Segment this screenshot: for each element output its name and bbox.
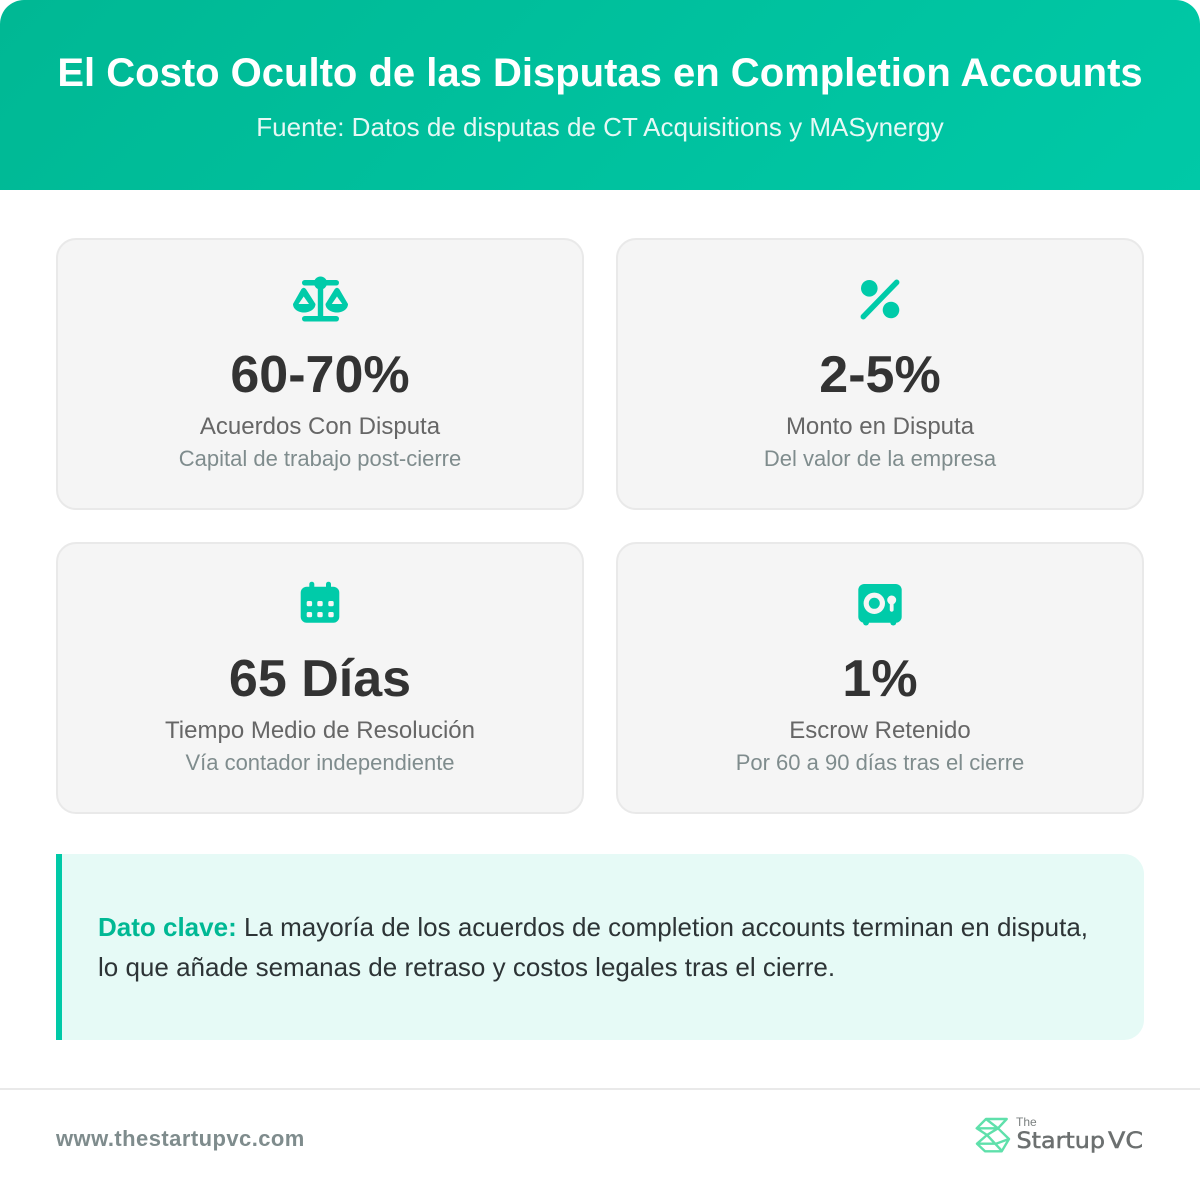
stat note: Capital de trabajo post-cierre bbox=[179, 446, 461, 471]
panel: tiempo medio de resolucion bbox=[56, 542, 584, 814]
logo: The Startup VC bbox=[975, 1115, 1143, 1154]
stat label: Acuerdos Con Disputa bbox=[200, 413, 440, 440]
logo: The Startup VC: Startup bbox=[1016, 1129, 1105, 1154]
icon: calendar bbox=[300, 582, 340, 623]
logo: The Startup VC: VC bbox=[1108, 1129, 1143, 1154]
callout: dato clave bbox=[56, 854, 1144, 1040]
website url: www.thestartupvc.com bbox=[56, 1126, 305, 1151]
icon: balance scale bbox=[293, 276, 348, 322]
logo: The Startup VC: The bbox=[1016, 1115, 1037, 1129]
subtitle: Fuente: Datos de disputas de CT Acquisitions y MASynergy bbox=[256, 112, 944, 142]
stat value: 60-70% bbox=[230, 346, 410, 404]
footer bbox=[0, 1088, 1200, 1188]
icon: safe bbox=[858, 584, 902, 626]
stat note: Por 60 a 90 días tras el cierre bbox=[736, 750, 1024, 775]
stat label: Escrow Retenido bbox=[789, 717, 971, 744]
stat note: Del valor de la empresa bbox=[764, 446, 996, 471]
stat value: 1% bbox=[842, 650, 918, 708]
stat value: 2-5% bbox=[819, 346, 941, 404]
header banner bbox=[0, 0, 1200, 190]
callout: dato clave: lo que añade semanas de retraso y costos legales tras el cierre. bbox=[98, 952, 835, 982]
panel: escrow retenido bbox=[616, 542, 1144, 814]
stat value: 65 Días bbox=[229, 650, 411, 708]
callout: dato clave: Dato clave: La mayoría de los acuerdos de completion accounts terminan en disputa, bbox=[98, 912, 1088, 942]
title: El Costo Oculto de las Disputas en Completion Accounts bbox=[57, 51, 1143, 95]
stat note: Vía contador independiente bbox=[185, 750, 455, 775]
stat label: Monto en Disputa bbox=[786, 413, 974, 440]
stat label: Tiempo Medio de Resolución bbox=[165, 717, 475, 744]
icon: percent bbox=[860, 280, 900, 320]
panel: monto en disputa bbox=[616, 238, 1144, 510]
panel: acuerdos con disputa bbox=[56, 238, 584, 510]
